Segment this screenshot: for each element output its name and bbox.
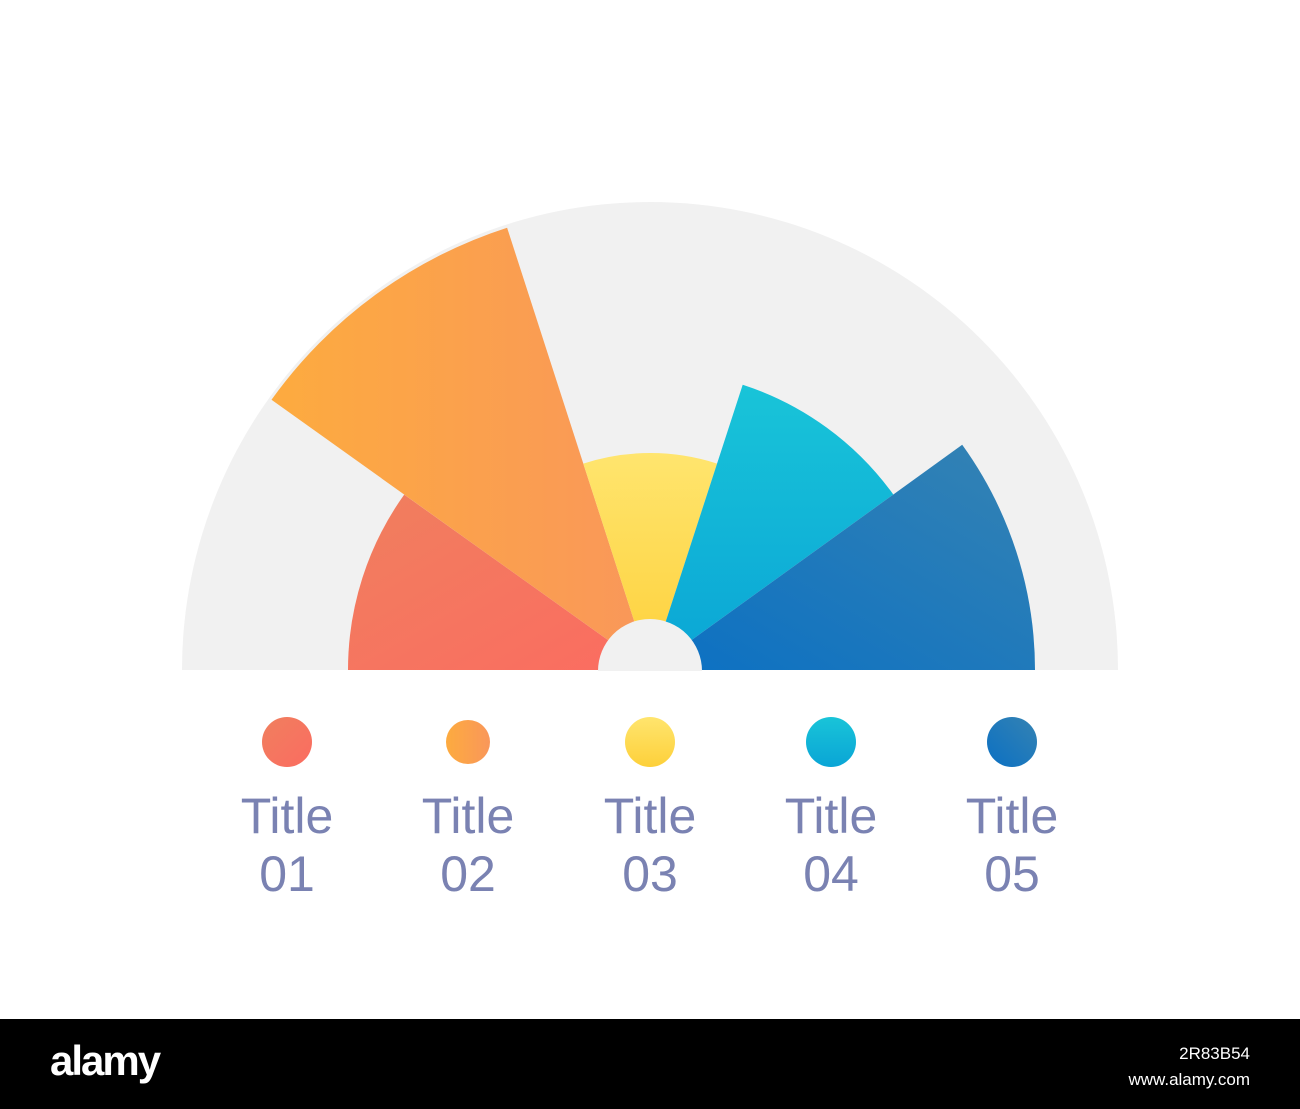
footer bar [0, 1019, 1300, 1109]
sector 2 orange [272, 228, 650, 670]
legend label 1: Title [241, 788, 333, 844]
legend label 4: 04 [803, 846, 859, 902]
legend label 3: 03 [622, 846, 678, 902]
legend label 2 [422, 788, 514, 902]
legend dots [262, 717, 1037, 767]
legend label 5: Title [966, 788, 1058, 844]
background semicircle [182, 202, 1118, 670]
footer id: 2R83B54 [1179, 1044, 1250, 1063]
legend label 1 [241, 788, 333, 902]
sector 5 blue [650, 445, 1035, 670]
legend label 1: 01 [259, 846, 315, 902]
legend label 3 [604, 788, 696, 902]
legend label 3: Title [604, 788, 696, 844]
footer logo: alamy [50, 1037, 159, 1084]
legend label 4: Title [785, 788, 877, 844]
sector 3 yellow [583, 453, 717, 670]
footer id: www.alamy.com [1128, 1070, 1250, 1089]
sector 1 red [348, 495, 650, 670]
center hub [598, 619, 702, 671]
legend label 4 [785, 788, 877, 902]
legend label 5 [966, 788, 1058, 902]
legend label 2: 02 [440, 846, 496, 902]
legend label 5: 05 [984, 846, 1040, 902]
footer id [1128, 1044, 1250, 1089]
legend label 2: Title [422, 788, 514, 844]
sector 4 cyan [650, 385, 893, 670]
